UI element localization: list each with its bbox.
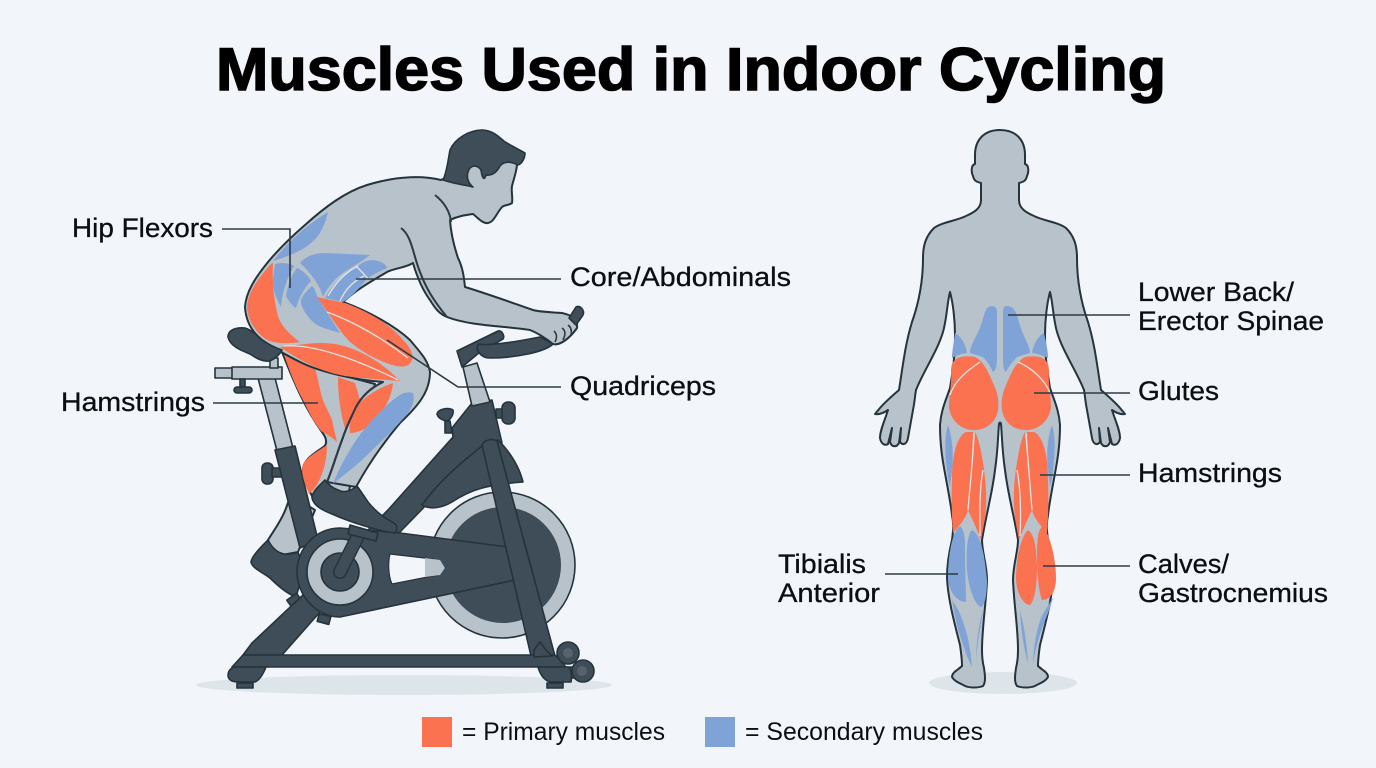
label: Lower Back / Erector Spinae xyxy=(1008,277,1324,336)
hair xyxy=(443,130,525,187)
rear casters xyxy=(557,642,594,682)
hamstrings orange xyxy=(952,432,1048,540)
rear leg orange muscles xyxy=(283,352,361,494)
label: Calves / Gastrocnemius: Gastrocnemius xyxy=(1138,578,1328,608)
body left half xyxy=(875,130,1000,688)
title: Muscles Used in Indoor Cycling xyxy=(216,36,1166,103)
cyclist illustration xyxy=(196,130,612,695)
hand fingers xyxy=(554,325,571,342)
label: Glutes: Glutes xyxy=(1138,376,1219,406)
torso arm and thigh xyxy=(245,150,577,487)
seat slider xyxy=(215,358,282,393)
floor shadow: bike xyxy=(196,675,612,695)
fender xyxy=(422,440,523,508)
legend: primary: = Primary muscles xyxy=(462,718,665,746)
label: Core/Abdominals: Core/Abdominals xyxy=(570,262,791,292)
housing window xyxy=(389,554,445,584)
label: Lower Back / Erector Spinae: Erector Spinae xyxy=(1138,306,1324,336)
rib separators xyxy=(328,266,368,301)
cyclist body xyxy=(245,150,577,510)
label: Quadriceps xyxy=(387,340,716,401)
seat post knob xyxy=(262,463,282,484)
chest arm line xyxy=(401,228,447,317)
rear lower leg xyxy=(268,495,315,555)
front post knob xyxy=(496,402,515,424)
crank arm xyxy=(340,534,359,572)
crank pivot tabs xyxy=(287,593,331,624)
label: Calves / Gastrocnemius: Calves/ xyxy=(1138,549,1230,579)
label: Quadriceps: Quadriceps xyxy=(570,371,716,401)
hip blue muscles xyxy=(273,212,387,333)
flywheel xyxy=(429,492,575,638)
body right half xyxy=(1000,130,1125,688)
handlebar stem xyxy=(463,363,490,406)
shin blue muscle xyxy=(333,392,414,484)
label: Hip Flexors xyxy=(72,213,290,288)
hamstring seams xyxy=(968,434,1032,536)
body fill seam xyxy=(996,134,1004,420)
right calf orange xyxy=(1016,527,1056,664)
glute seams xyxy=(950,362,1050,395)
label: Tibialis Anterior xyxy=(778,549,958,608)
crank housing xyxy=(297,528,515,617)
glute orange xyxy=(247,263,300,343)
seat post lower xyxy=(275,446,318,548)
label: Calves / Gastrocnemius xyxy=(1043,549,1328,608)
legend xyxy=(422,717,983,747)
neck shoulder line xyxy=(435,195,451,222)
back-view figure xyxy=(875,130,1125,694)
quadriceps orange xyxy=(280,297,412,433)
label: Tibialis Anterior: Tibialis xyxy=(778,549,866,579)
label: Lower Back / Erector Spinae: Lower Back/ xyxy=(1138,277,1295,307)
seat post upper xyxy=(258,378,293,451)
outer thigh blue xyxy=(945,425,1055,487)
fork tube xyxy=(482,440,555,656)
base and feet xyxy=(228,642,572,688)
seat xyxy=(228,328,282,361)
left calf blue xyxy=(948,526,987,667)
visible flywheel in window xyxy=(425,558,445,577)
floor shadow: figure xyxy=(929,672,1077,694)
pedal xyxy=(348,525,378,541)
crank ring xyxy=(307,539,373,605)
lower back blue muscles xyxy=(952,306,1048,372)
label: Tibialis Anterior: Anterior xyxy=(778,578,880,608)
handlebar xyxy=(457,307,583,367)
frame knob xyxy=(437,409,453,433)
glutes orange xyxy=(949,356,1051,430)
label: Hamstrings (back view): Hamstrings xyxy=(1138,458,1282,488)
quad tendon lines xyxy=(284,312,408,380)
main frame diagonal xyxy=(243,400,502,655)
legend: secondary: = Secondary muscles xyxy=(745,718,983,746)
front shoe xyxy=(312,480,397,533)
rear shoe xyxy=(251,540,304,597)
label: Hamstrings (side view): Hamstrings xyxy=(61,387,205,417)
label: Hip Flexors: Hip Flexors xyxy=(72,213,213,243)
rear leg xyxy=(282,352,375,510)
knee pit outline xyxy=(327,382,383,482)
